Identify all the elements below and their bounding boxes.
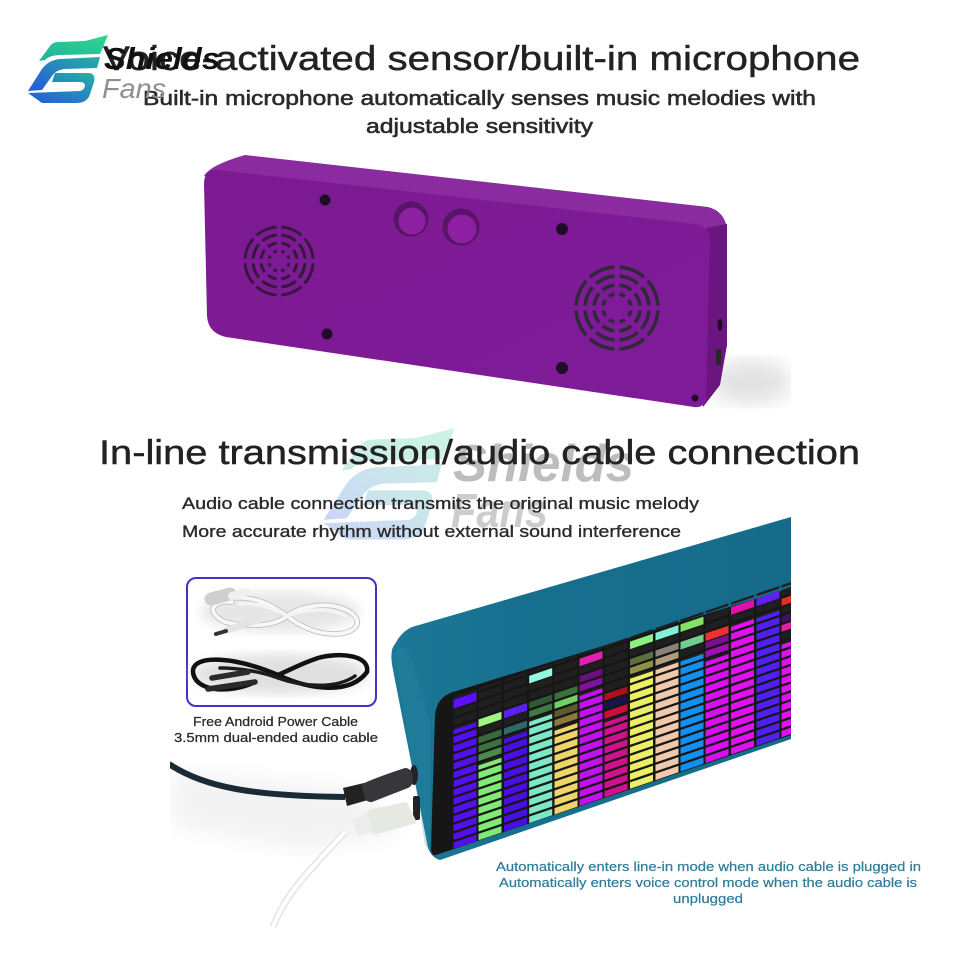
caption: included cables: 3.5mm dual-ended audio cable [174,731,378,745]
right speaker grille [574,265,660,351]
watermark: Shields Fans wordmark: Shields [453,435,634,493]
subtitle: built-in microphone: adjustable sensitivity [366,116,593,138]
white power cable [211,592,357,634]
note: line-in mode behaviour: unplugged [673,892,743,906]
watermark: Shields Fans wordmark [451,435,634,538]
black audio cable [193,655,367,689]
note: line-in mode behaviour [496,860,921,906]
audio jack cable [169,764,413,806]
caption: included cables: Free Android Power Cable [193,715,358,729]
product photo: teal sound-level display [169,517,804,927]
body side highlight [416,785,428,848]
left speaker grille [244,226,314,296]
logo wordmark: Fans [102,73,166,104]
panel: included cables [187,578,376,706]
text: audio cable benefits: More accurate rhythm without external sound interference [182,522,681,541]
unlit segments [454,582,791,765]
watermark: Shields Fans wordmark: Fans [451,485,548,538]
title: voice-activated sensor: Voice-activated sensor/built-in microphone [103,40,860,78]
logo: Shields Fans, top left [28,35,220,104]
peak and dim segments [454,590,791,762]
device front face [204,170,710,407]
product photo: purple device rear [204,155,792,407]
device side face [703,224,727,407]
screw holes [320,194,722,402]
level bars [454,577,804,849]
logo mark [28,35,108,103]
text: audio cable benefits: Audio cable connection transmits the original music melody [182,494,700,513]
watermark: central logo [324,428,455,540]
device body [391,517,791,860]
round buttons [394,202,480,246]
subtitle: built-in microphone [143,88,816,138]
caption: included cables [174,715,378,745]
title: in-line transmission: In-line transmission/audio cable connection [99,434,860,472]
background shadow [176,778,372,844]
white power cable plug [273,802,417,927]
lit columns [454,726,476,845]
logo wordmark [102,41,220,104]
logo wordmark: Shields [104,41,220,76]
text: audio cable benefits [182,494,700,541]
note: line-in mode behaviour: Automatically enters voice control mode when the audio cable is [499,876,917,890]
black screen [431,588,791,855]
device shadow [708,360,792,404]
device ports [410,765,420,820]
device top face [204,155,727,232]
note: line-in mode behaviour: Automatically enters line-in mode when audio cable is plugged in [496,860,921,874]
subtitle: built-in microphone: Built-in microphone automatically senses music melodies with [143,88,816,110]
